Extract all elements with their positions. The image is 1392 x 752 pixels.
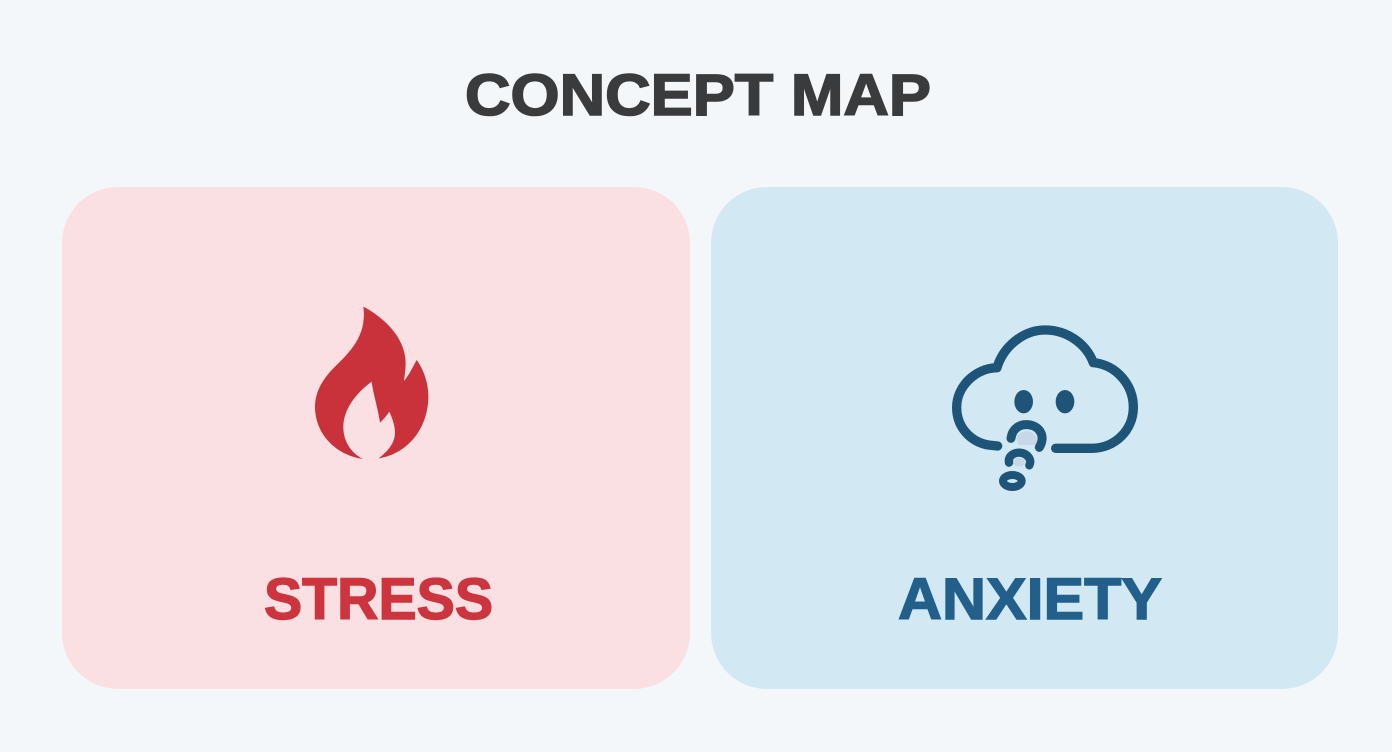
lowest bubble (1003, 475, 1022, 487)
stress label: STRESS (264, 567, 493, 632)
anxiety panel background (711, 187, 1338, 689)
right eye (1056, 390, 1074, 413)
icon: anxious cloud (957, 330, 1133, 487)
icon: flame (315, 307, 428, 459)
panel: stress (62, 187, 690, 689)
mouth arc (1011, 425, 1042, 447)
title: CONCEPT MAP (465, 63, 931, 128)
anxiety label: ANXIETY (898, 567, 1162, 632)
panel: anxiety (711, 187, 1338, 689)
small bubble arc (1009, 453, 1030, 465)
small bubble fill (1013, 458, 1025, 466)
stress panel background (62, 187, 690, 689)
mouth fill (1017, 431, 1038, 445)
cloud outline (957, 330, 1133, 448)
left eye (1014, 390, 1033, 413)
